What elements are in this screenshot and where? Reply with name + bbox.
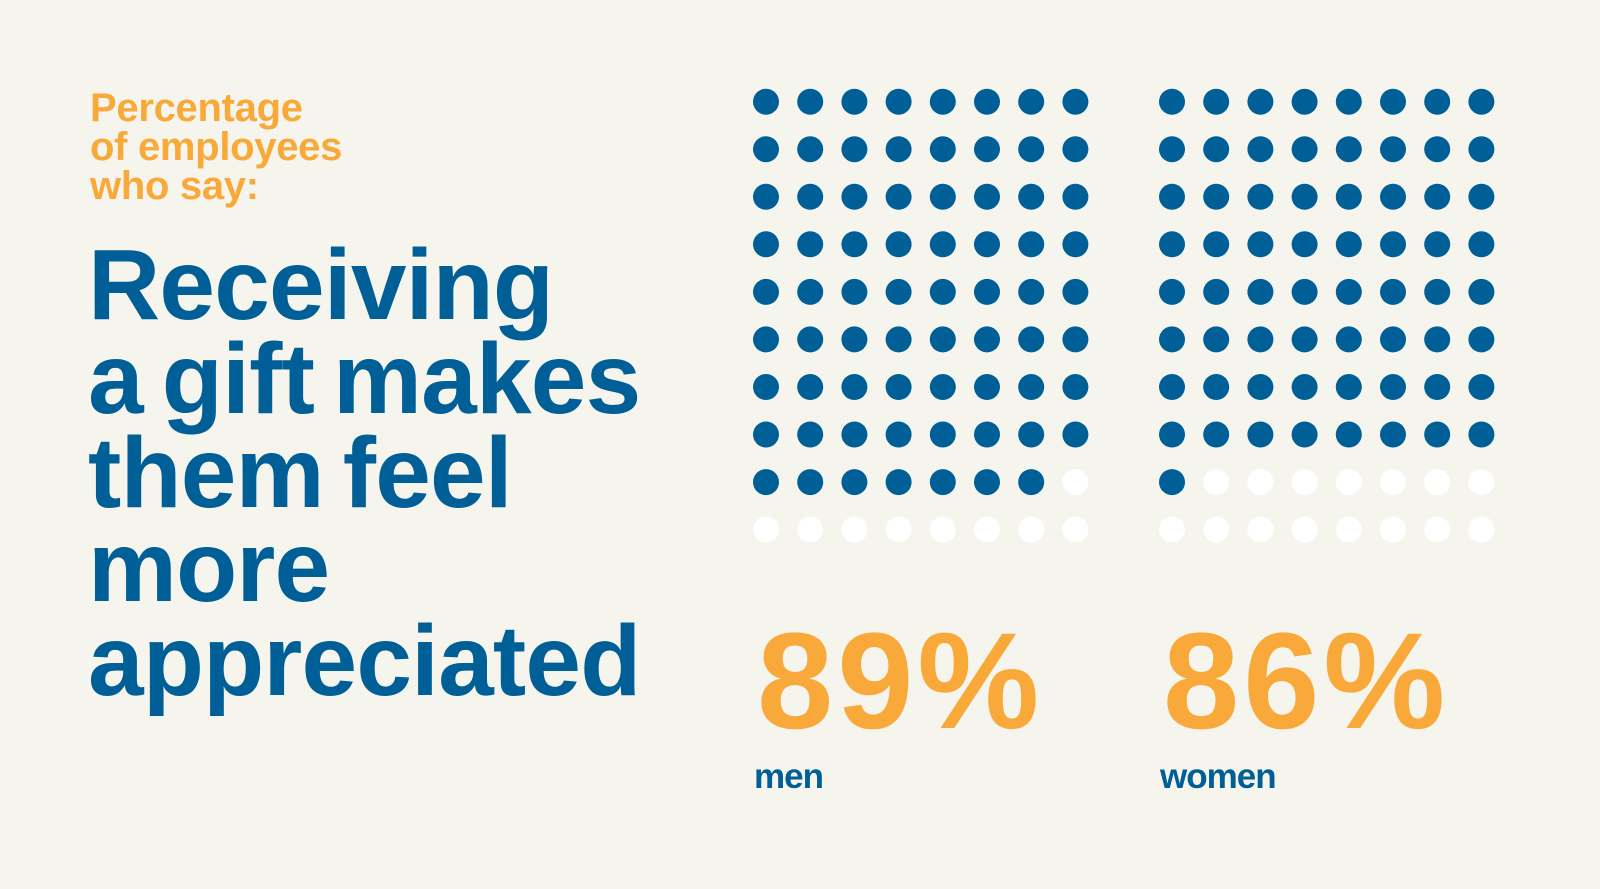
stat: men 89%: 89%: [757, 605, 1043, 758]
main heading: [88, 229, 641, 717]
stat: women 86%: 86%: [1163, 605, 1449, 758]
label: women: women: [1160, 757, 1276, 796]
main heading: them feel: [88, 417, 512, 529]
dot grid: women: [1159, 89, 1494, 543]
subtitle: of employees: [90, 125, 342, 169]
main heading: Receiving: [88, 229, 553, 341]
main heading: more: [88, 511, 329, 623]
label: men: men: [754, 757, 823, 796]
subtitle: Percentage: [90, 86, 303, 130]
main heading: a gift makes: [88, 323, 640, 435]
main heading: appreciated: [88, 605, 641, 717]
dot grid: men: [753, 89, 1088, 543]
subtitle: who say:: [90, 164, 259, 208]
subtitle: [90, 86, 342, 208]
